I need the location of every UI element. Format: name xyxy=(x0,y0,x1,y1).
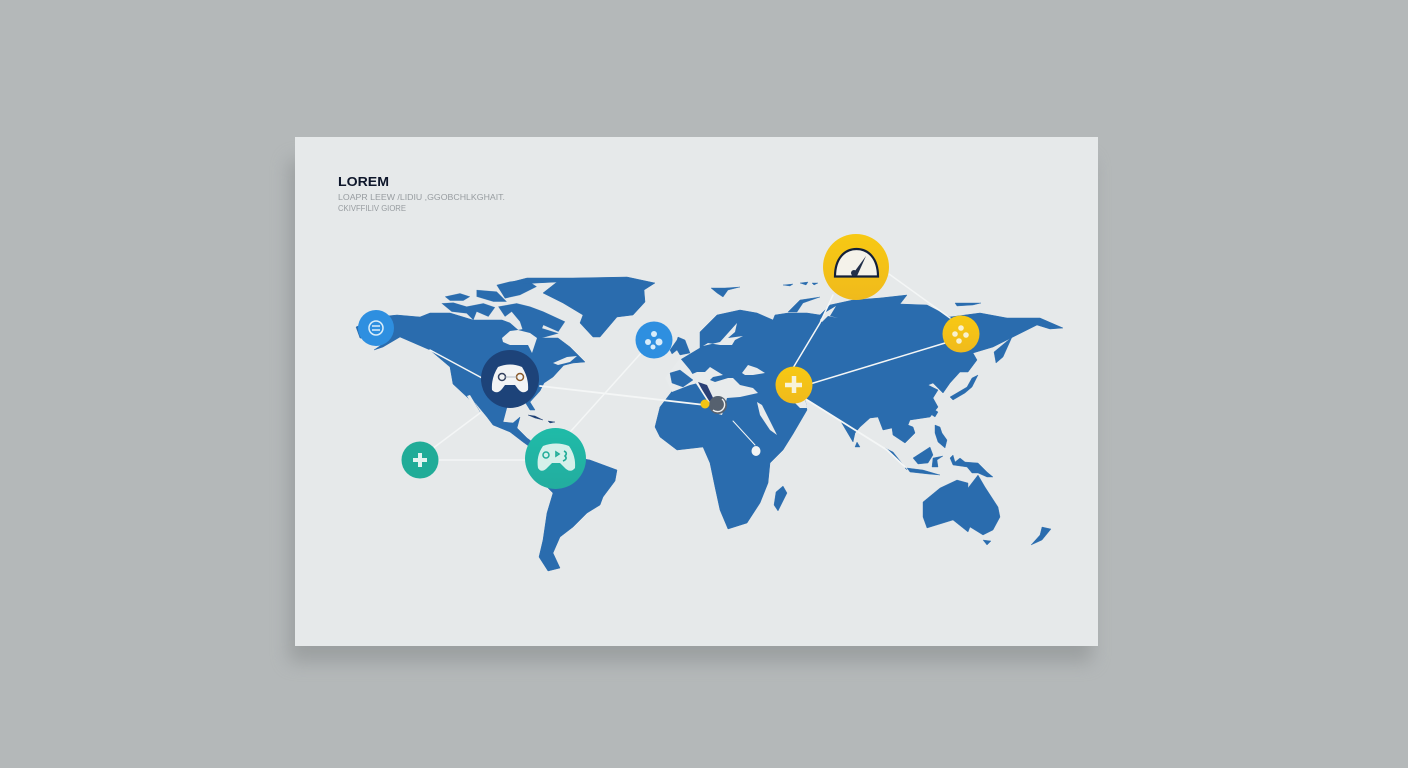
island: New Zealand xyxy=(1031,527,1051,545)
node: green plus xyxy=(402,442,438,478)
text block: subtitle: CKIVFFILIV GIORE xyxy=(338,204,406,213)
landmass: Canadian archipelago xyxy=(442,280,565,339)
island: Caribbean xyxy=(528,415,555,423)
island: Java xyxy=(907,468,940,475)
text block: subtitle xyxy=(338,193,505,213)
island: Novaya Zemlya xyxy=(788,297,820,312)
heading: LOREM: LOREM xyxy=(338,175,389,189)
island: Svalbard xyxy=(711,287,740,297)
island: Madagascar xyxy=(774,486,787,511)
map islands xyxy=(528,282,1051,545)
node: blue puzzle xyxy=(636,322,672,358)
island: Tasmania xyxy=(983,540,991,545)
node: blue chat xyxy=(358,310,394,346)
island: Britain xyxy=(670,337,690,355)
node: navy controller xyxy=(481,350,539,408)
island: Taiwan xyxy=(932,410,938,417)
island: Sulawesi xyxy=(932,456,943,467)
node: yellow plus xyxy=(776,366,812,404)
landmass: Eurasia and Africa xyxy=(655,295,1063,529)
island: New Guinea xyxy=(950,455,993,477)
world map xyxy=(356,277,1063,571)
landmass: Greenland xyxy=(500,277,655,337)
island: Sakhalin xyxy=(994,337,1012,363)
island: Sumatra xyxy=(885,448,907,470)
text block: subtitle: LOAPR LEEW /LIDIU ,GGOBCHLKGHAIT. xyxy=(338,193,505,202)
island: Japan xyxy=(950,375,978,400)
island: Philippines xyxy=(935,425,947,448)
connector lines xyxy=(420,274,950,467)
node: yellow gauge xyxy=(823,234,889,300)
island: Borneo xyxy=(913,447,933,464)
map inland water xyxy=(467,306,838,435)
island: Iberia xyxy=(670,370,693,387)
landmass: South America xyxy=(537,457,617,571)
island: Sri Lanka xyxy=(855,442,860,447)
node: teal controller xyxy=(525,428,586,489)
landmass: Australia xyxy=(923,475,1000,535)
landmass: North America xyxy=(356,313,585,452)
node: Africa target xyxy=(752,446,760,456)
node: yellow dots xyxy=(942,316,980,352)
icon: central marker xyxy=(697,382,727,414)
panel: map card xyxy=(295,137,1098,646)
